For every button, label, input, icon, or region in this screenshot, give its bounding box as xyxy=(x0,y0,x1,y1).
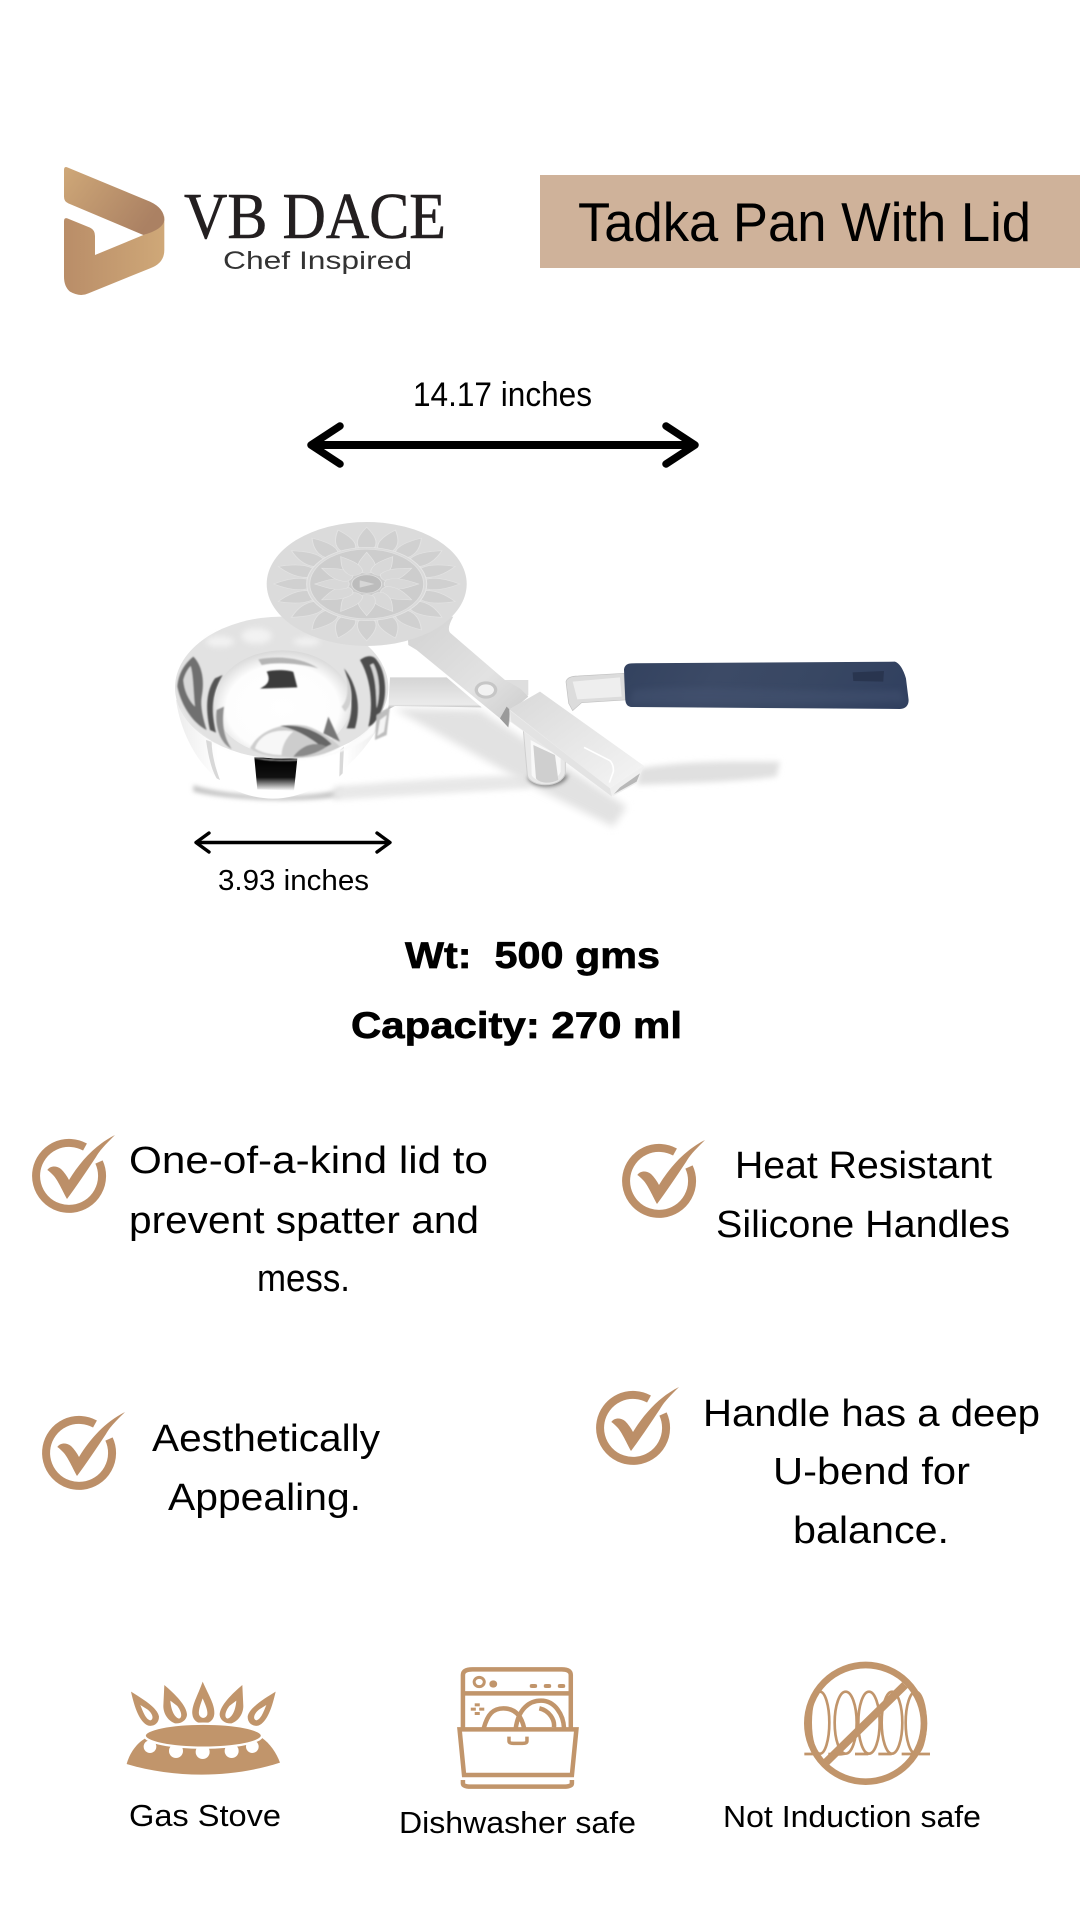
shadows xyxy=(193,708,627,827)
icon: check xyxy=(600,1387,679,1461)
feature: lid xyxy=(36,1135,488,1300)
capacity: Capacity: 270 ml xyxy=(351,1005,682,1046)
rear bracket xyxy=(503,680,528,710)
icon: dishwasher xyxy=(460,1669,576,1787)
coil xyxy=(804,1692,930,1754)
black reflection xyxy=(254,757,297,791)
text: u-bend handle xyxy=(703,1393,1040,1552)
text: aesthetics: Aesthetically xyxy=(152,1418,380,1460)
text: silicone handles xyxy=(716,1145,1010,1246)
feature: silicone handles xyxy=(626,1140,1010,1246)
text: silicone handles: Silicone Handles xyxy=(716,1204,1010,1246)
pan handle xyxy=(388,677,482,709)
icon: check xyxy=(36,1135,115,1209)
rim xyxy=(175,617,388,759)
feature: aesthetics xyxy=(46,1412,380,1519)
handle assembly xyxy=(509,662,909,797)
bracket xyxy=(566,673,625,711)
weight: Wt: 500 gms xyxy=(405,935,660,976)
logo mark xyxy=(64,167,164,295)
label: Dishwasher safe xyxy=(399,1805,636,1840)
rivet xyxy=(475,681,497,699)
text: u-bend handle: balance. xyxy=(793,1510,949,1552)
lid arm xyxy=(407,617,528,727)
hoop xyxy=(527,775,568,786)
label: Gas Stove xyxy=(129,1798,281,1833)
icon: no induction xyxy=(804,1665,930,1782)
text: u-bend handle: Handle has a deep xyxy=(703,1393,1040,1435)
title banner xyxy=(540,175,1080,268)
title: Tadka Pan With Lid xyxy=(578,191,1031,253)
text: aesthetics: Appealing. xyxy=(168,1477,361,1519)
icon: gas burner xyxy=(127,1682,280,1775)
logo: VB Dace xyxy=(64,167,446,295)
text: silicone handles: Heat Resistant xyxy=(735,1145,992,1187)
pan body xyxy=(176,700,387,799)
width label: 3.93 inches xyxy=(218,865,369,897)
lower lid handle xyxy=(509,692,644,796)
lid disc with mandala xyxy=(267,522,467,646)
blue silicone handle xyxy=(624,662,909,709)
usage: not induction safe xyxy=(723,1665,981,1834)
pan and arm xyxy=(175,617,528,799)
product photo: tadka pan with lid xyxy=(175,522,909,827)
text: lid xyxy=(129,1140,488,1300)
text: lid: mess. xyxy=(257,1258,350,1300)
rim reflections xyxy=(177,656,390,740)
handle hole xyxy=(853,671,884,682)
label: Not Induction safe xyxy=(723,1799,981,1834)
text: aesthetics xyxy=(152,1418,380,1519)
text: lid: prevent spatter and xyxy=(129,1200,479,1242)
icon: check xyxy=(626,1140,705,1214)
length label: 14.17 inches xyxy=(413,376,592,414)
usage: dishwasher safe xyxy=(399,1669,636,1840)
feature: u-bend handle xyxy=(600,1387,1040,1552)
icon: check xyxy=(46,1412,125,1486)
text: lid: One-of-a-kind lid to xyxy=(129,1140,488,1182)
usage: gas stove xyxy=(127,1682,281,1833)
text: u-bend handle: U-bend for xyxy=(773,1451,970,1493)
prohibition sign xyxy=(807,1665,924,1782)
brand name: VB DACE xyxy=(184,180,446,253)
mandala pattern xyxy=(274,527,460,641)
dimension: length arrow xyxy=(311,376,695,464)
inner bowl xyxy=(214,650,351,755)
dimension: width arrow xyxy=(196,833,390,897)
tagline: Chef Inspired xyxy=(223,247,412,275)
